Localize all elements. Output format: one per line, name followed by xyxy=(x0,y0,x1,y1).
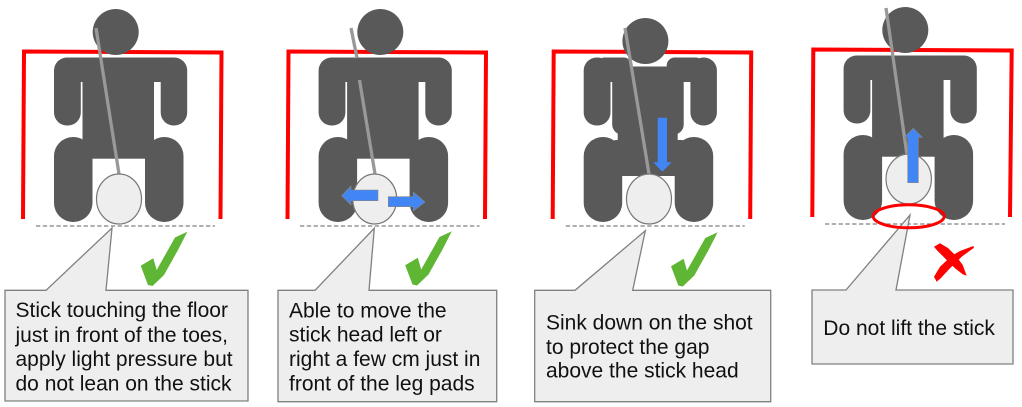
icon: green check xyxy=(141,232,187,286)
callout: touching the floor: Stick touching the floor xyxy=(16,299,228,322)
callout: touching the floor xyxy=(5,228,248,401)
callout: sink down: above the stick head xyxy=(546,360,739,383)
goalie figure xyxy=(54,9,187,222)
panel: sink down on the shot xyxy=(535,18,771,402)
hockey stick xyxy=(886,8,931,204)
panel: stick touching the floor xyxy=(5,9,248,401)
goal frame xyxy=(812,50,1012,217)
callout: touching the floor: do not lean on the stick xyxy=(16,372,232,396)
callout: sink down: Sink down on the shot xyxy=(546,311,753,334)
highlight: red ellipse xyxy=(873,205,944,228)
callout: move left or right xyxy=(278,228,497,402)
callout: move left or right: stick head left or xyxy=(289,324,442,347)
icon: green check xyxy=(405,231,452,286)
goal frame xyxy=(23,52,222,219)
callout: do not lift xyxy=(812,215,1013,364)
panel: do not lift the stick xyxy=(812,7,1013,364)
hockey stick xyxy=(96,28,142,224)
floor line xyxy=(300,225,480,227)
callout: sink down xyxy=(535,231,771,402)
floor line xyxy=(825,223,1005,225)
arrow: right xyxy=(388,192,425,211)
callout: do not lift: Do not lift the stick xyxy=(823,317,995,340)
callout: move left or right: right a few cm just in xyxy=(289,348,480,371)
goalie figure xyxy=(844,7,977,220)
callout: move left or right: front of the leg pads xyxy=(289,373,475,396)
goal frame xyxy=(553,52,751,219)
goalie figure xyxy=(584,18,717,222)
hockey stick xyxy=(351,28,397,224)
panel: move the stick head left or right xyxy=(278,9,497,402)
floor line xyxy=(36,225,215,227)
icon: red cross xyxy=(934,243,974,282)
callout: touching the floor: just in front of the toes, xyxy=(14,324,228,347)
goalie figure xyxy=(319,9,452,222)
floor line xyxy=(566,225,745,227)
arrow: down xyxy=(653,118,672,172)
hockey stick xyxy=(625,28,672,224)
callout: touching the floor: apply light pressure but xyxy=(16,348,233,371)
arrow: up xyxy=(904,128,922,183)
callout: sink down: to protect the gap xyxy=(546,336,709,359)
icon: green check xyxy=(671,232,718,286)
goal frame xyxy=(288,52,486,219)
arrow: left xyxy=(342,186,378,205)
callout: move left or right: Able to move the xyxy=(289,299,447,322)
